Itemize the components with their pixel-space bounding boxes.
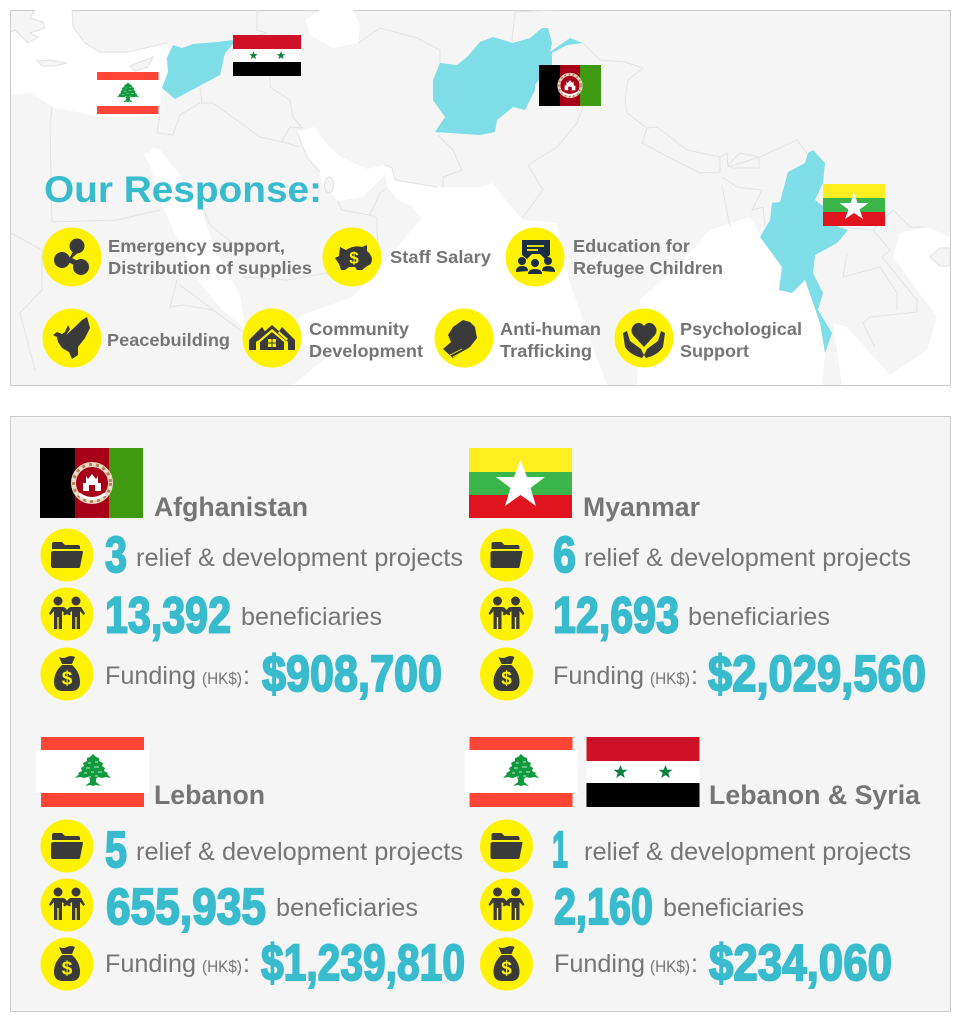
item: psychological support: Support	[680, 341, 749, 361]
item: education for refugee children: Refugee Children	[573, 258, 723, 278]
section: Lebanon	[36, 737, 465, 991]
flag: Lebanon	[464, 737, 578, 807]
stat: funding: $234,060	[709, 934, 892, 991]
stat: funding: :	[243, 950, 250, 978]
stat: beneficiaries: 655,935	[106, 878, 266, 935]
item: community development: Development	[309, 341, 423, 361]
stat: funding	[480, 934, 892, 991]
item: staff salary	[322, 228, 491, 286]
stat: projects: 3	[105, 526, 127, 583]
stat: funding: Funding	[105, 662, 196, 690]
item: staff salary: $	[349, 248, 359, 268]
stat: funding: (HK$)	[202, 669, 242, 688]
flag: Afghanistan on map	[539, 65, 601, 106]
stat: funding: (HK$)	[650, 957, 690, 976]
flag: Myanmar on map	[823, 184, 885, 226]
stat: projects	[480, 526, 911, 583]
item: emergency support: Distribution of supplies	[108, 258, 312, 278]
section: Lebanon and Syria	[464, 737, 921, 991]
stat: beneficiaries: 2,160	[554, 878, 653, 935]
item: psychological support	[614, 308, 802, 368]
stat: funding: Funding	[105, 950, 196, 978]
item: peacebuilding: Peacebuilding	[107, 330, 230, 350]
title: Lebanon and Syria: Lebanon & Syria	[709, 780, 921, 810]
stat: funding: (HK$)	[202, 957, 242, 976]
country: Syria highlighted	[162, 40, 233, 99]
stat: beneficiaries	[480, 878, 804, 935]
country: Myanmar highlighted	[760, 150, 848, 353]
item: psychological support: Psychological	[680, 319, 802, 339]
stat: funding: Funding	[554, 950, 645, 978]
section: Afghanistan	[40, 448, 463, 702]
flag: Syria	[586, 737, 700, 807]
map: seas and borders	[11, 10, 950, 385]
item: anti-human trafficking	[434, 308, 601, 368]
stat: projects	[40, 526, 463, 583]
stat: funding: $1,239,810	[261, 934, 465, 991]
stat: projects: relief & development projects	[136, 544, 463, 572]
stat: funding: :	[691, 950, 698, 978]
item: education for refugee children	[506, 228, 723, 286]
section: Myanmar	[469, 448, 926, 702]
title: Afghanistan: Afghanistan	[154, 492, 308, 522]
item: staff salary: Staff Salary	[390, 247, 491, 267]
stat: projects	[480, 820, 911, 878]
stat: beneficiaries: 12,693	[553, 586, 679, 644]
flag: Lebanon on map	[97, 72, 159, 114]
stat: beneficiaries: beneficiaries	[663, 894, 804, 922]
stat: funding: $908,700	[262, 645, 442, 702]
stat: beneficiaries	[480, 586, 830, 644]
panel: country statistics	[10, 416, 950, 1012]
stat: funding: Funding	[553, 662, 644, 690]
stat: funding: (HK$)	[650, 669, 690, 688]
stat: beneficiaries	[40, 586, 382, 644]
stat: funding	[480, 645, 926, 702]
stat: projects: relief & development projects	[584, 544, 911, 572]
item: emergency support	[42, 228, 312, 286]
flag: Lebanon	[36, 737, 149, 807]
item: community development	[242, 308, 423, 368]
item: community development: Community	[309, 319, 409, 339]
flag: Afghanistan	[40, 448, 143, 518]
stat: beneficiaries: beneficiaries	[241, 603, 382, 631]
stat: funding: :	[691, 662, 698, 690]
stat: beneficiaries: beneficiaries	[688, 603, 830, 631]
stat: projects: relief & development projects	[584, 838, 911, 866]
title: Lebanon: Lebanon	[154, 780, 265, 810]
stat: beneficiaries: beneficiaries	[276, 894, 418, 922]
stat: funding	[40, 934, 465, 991]
stat: funding	[40, 645, 442, 702]
item: anti-human trafficking: Anti-human	[500, 319, 601, 339]
stat: projects	[40, 820, 463, 878]
stat: funding: :	[243, 662, 250, 690]
stat: projects: 1	[552, 821, 568, 878]
stat: projects: 5	[105, 821, 127, 878]
item: peacebuilding	[42, 308, 230, 368]
item: education for refugee children: Education for	[573, 236, 690, 256]
stat: beneficiaries: 13,392	[105, 586, 231, 644]
title: Myanmar: Myanmar	[583, 492, 700, 522]
stat: beneficiaries	[40, 878, 418, 935]
stat: projects: relief & development projects	[136, 838, 463, 866]
heading: Our Response: Our Response:	[44, 169, 322, 210]
stat: funding: $2,029,560	[708, 645, 926, 702]
panel: map with response	[10, 10, 950, 386]
flag: Syria on map	[233, 35, 301, 76]
country: Afghanistan highlighted	[433, 28, 583, 135]
flag: Myanmar	[469, 448, 572, 518]
item: emergency support: Emergency support,	[108, 236, 285, 256]
stat: projects: 6	[553, 526, 576, 583]
item: anti-human trafficking: Trafficking	[500, 341, 592, 361]
